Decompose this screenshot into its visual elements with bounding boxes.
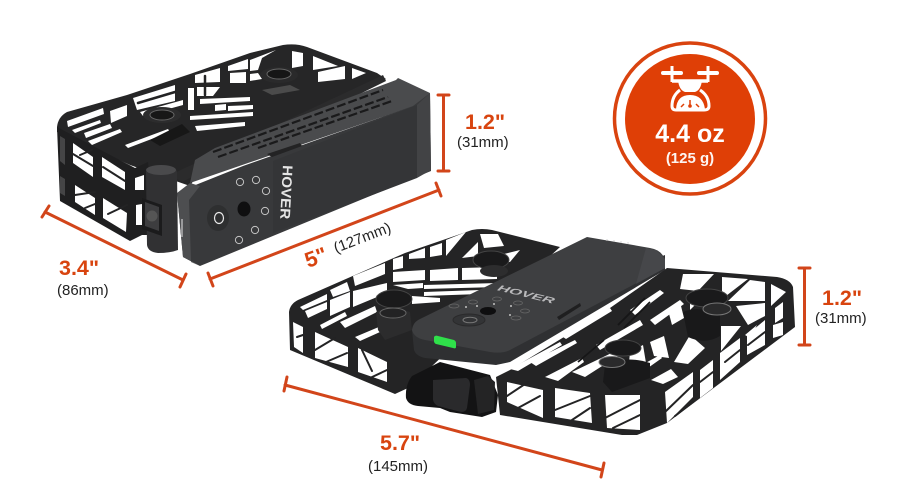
folded drone: cage side openings: [73, 143, 144, 232]
unfolded drone: body front: [412, 255, 665, 365]
unfolded drone: left front propeller: [376, 290, 412, 340]
unfolded drone: status LEDs: [606, 240, 629, 243]
metric value: (86mm): [57, 282, 109, 299]
unfolded drone: side slot: [557, 303, 581, 320]
folded drone: vent slots: [213, 90, 392, 157]
folded drone: end rim: [177, 183, 200, 266]
value: 1.2": [822, 286, 862, 310]
dimension: unfolded height: [799, 268, 867, 345]
metric value: (31mm): [815, 310, 867, 327]
unfolded drone: body rear end: [636, 248, 665, 284]
unfolded drone: rear right motor: [683, 289, 731, 341]
folded drone: side slot: [267, 143, 302, 157]
bracket: [438, 95, 449, 171]
unfolded drone: camera gimbal: [406, 362, 498, 417]
metric value: (145mm): [368, 458, 428, 475]
unfolded drone: controls: [449, 297, 530, 326]
unfolded drone illustration: [289, 229, 795, 435]
folded drone: controls: [207, 176, 270, 244]
folded drone: right end cap: [417, 93, 431, 178]
folded drone: front face of body: [177, 93, 431, 266]
unfolded drone: hatched arms: [578, 298, 650, 362]
unfolded drone: left cage struts: [297, 335, 387, 378]
icon: drone on scale: [661, 66, 719, 110]
value: 5": [302, 243, 331, 273]
folded drone: cage side: [57, 127, 155, 241]
folded drone illustration: [57, 44, 431, 266]
folded drone: indicator strip: [181, 219, 183, 237]
unfolded drone: front right motor: [599, 340, 650, 392]
folded drone: HOVER logo: HOVER: [277, 165, 296, 220]
folded drone: upper propeller: [260, 67, 300, 95]
unfolded drone: HOVER logo: HOVER: [494, 283, 559, 305]
unfolded drone: right cage silhouette: [496, 268, 795, 435]
metric value: (127mm): [331, 219, 393, 257]
folded drone: front rear section: [273, 105, 417, 233]
folded drone: camera gimbal: [142, 165, 178, 253]
weight metric: (125 g): [666, 150, 714, 167]
folded drone: cage side struts: [73, 150, 127, 214]
unfolded drone: green LED: [434, 336, 456, 348]
folded drone: left narrow slots: [60, 136, 65, 196]
badge ring: [614, 43, 766, 194]
metric value: (31mm): [457, 134, 509, 151]
unfolded drone: left cage silhouette: [289, 229, 560, 394]
folded drone: cage top silhouette: [57, 44, 386, 186]
value: 3.4": [59, 256, 99, 280]
value: 1.2": [465, 110, 505, 134]
dimension: unfolded length: [284, 377, 604, 477]
bracket: [799, 268, 810, 345]
folded drone: cage rails: [138, 76, 205, 103]
weight badge: [614, 43, 766, 194]
folded drone: hinge bar: [170, 75, 386, 182]
value: 5.7": [380, 431, 420, 455]
unfolded drone: body top: [412, 237, 665, 353]
dimension: folded length: [208, 183, 441, 286]
bracket: [284, 377, 604, 477]
unfolded drone: right cage openings: [507, 274, 786, 430]
folded drone: top face of body: [190, 78, 430, 183]
folded drone: lower propeller: [143, 107, 190, 146]
dimension: folded height: [438, 95, 509, 171]
unfolded drone: left rear propeller: [473, 251, 509, 277]
unfolded drone: left cage openings: [293, 232, 520, 382]
bracket: [42, 206, 186, 287]
dimension: folded width: [42, 206, 186, 299]
badge disc: [625, 54, 755, 184]
weight imperial: 4.4 oz: [655, 120, 725, 148]
folded drone: cage top openings: [67, 50, 366, 148]
bracket: [208, 183, 441, 286]
unfolded drone: right cage side struts: [507, 332, 765, 428]
